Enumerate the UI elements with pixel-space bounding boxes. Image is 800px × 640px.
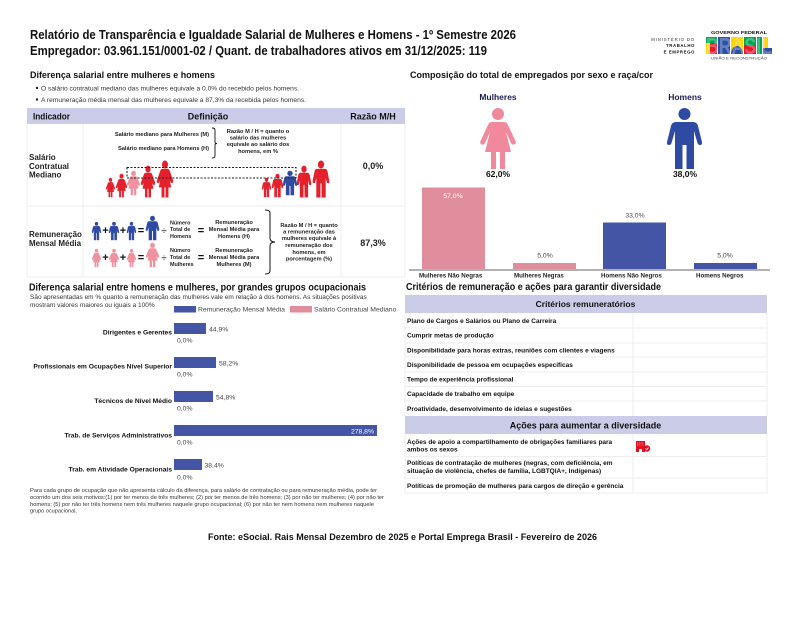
bar chart: grupos: 54,8% bbox=[216, 394, 235, 402]
bar chart: grupos: Profissionais em Ocupações Nível Superior bbox=[33, 364, 172, 370]
bar chart: grupos: Técnicos de Nível Médio bbox=[94, 398, 172, 405]
icon: homens 38,0%: 38,0% bbox=[673, 169, 697, 179]
source note: Fonte: eSocial. Rais Mensal Dezembro de 2025 e Portal Emprega Brasil - Fevereiro de 2026 bbox=[208, 532, 597, 543]
row: remuneração mensal média: Mulheres (M) bbox=[216, 262, 252, 268]
bar chart: composição: Homens Não Negros bbox=[601, 272, 662, 280]
row: remuneração mensal média: Total de bbox=[170, 255, 190, 261]
table header: Indicador bbox=[33, 112, 70, 122]
row: remuneração mensal média: Remuneração bbox=[215, 220, 253, 226]
icon: mulheres 62,0%: Mulheres bbox=[479, 92, 517, 102]
table: critérios remuneratórios: Plano de Cargos e Salários ou Plano de Carreira bbox=[407, 318, 557, 325]
legend: Remuneração Mensal Média bbox=[198, 306, 285, 314]
bar chart: grupos: 58,2% bbox=[219, 360, 238, 368]
bar chart: grupos: 0,0% bbox=[177, 406, 192, 412]
row: remuneração mensal média: mulheres equivale à bbox=[282, 236, 337, 242]
footnote: Para cada grupo de ocupação que não apresenta cálculo da diferença, para salário de contratação ou para remuneração média, pode ter bbox=[30, 488, 377, 494]
logo: governo federal brasil: UNIÃO E RECONSTRUÇÃO bbox=[711, 56, 767, 60]
table: critérios remuneratórios: Disponibilidade para horas extras, reuniões com clientes e viagens bbox=[407, 348, 615, 354]
text block: bullets: A remuneração média mensal das mulheres equivale a 87,3% da recebida pelos homens. bbox=[41, 97, 306, 104]
panel: diferença salarial bbox=[27, 70, 405, 277]
bar chart: grupos: Trab. de Serviços Administrativos bbox=[64, 432, 172, 440]
table: critérios remuneratórios: Critérios remuneratórios bbox=[536, 299, 636, 309]
table: critérios remuneratórios: Proatividade, desenvolvimento de ideias e sugestões bbox=[407, 406, 572, 413]
table: critérios remuneratórios: Capacidade de trabalho em equipe bbox=[407, 391, 515, 398]
operators: mulheres: + bbox=[102, 252, 109, 264]
icon: fórmula mulheres bbox=[92, 243, 159, 267]
title: Empregador: 03.961.151/0001-02 / Quant. de trabalhadores ativos em 31/12/2025: 119 bbox=[30, 44, 487, 58]
legend: Salário Contratual Mediano bbox=[314, 306, 397, 314]
table: indicadores bbox=[27, 108, 405, 277]
footnote bbox=[30, 488, 384, 514]
operators: mulheres bbox=[102, 252, 167, 264]
heading: composição: Composição do total de empregados por sexo e raça/cor bbox=[410, 70, 653, 81]
panel: grupos ocupacionais bbox=[29, 282, 397, 514]
row: remuneração mensal média: Total de bbox=[170, 227, 190, 233]
row: remuneração mensal média: Número bbox=[170, 248, 191, 254]
bar chart: grupos: 0,0% bbox=[177, 474, 192, 482]
row: remuneração mensal média: remuneração dos bbox=[285, 243, 333, 249]
row: remuneração mensal média: Número bbox=[170, 220, 191, 226]
row: remuneração mensal média: Razão M / H = quanto bbox=[280, 223, 338, 229]
bar chart: grupos: Trab. em Atividade Operacionais bbox=[69, 466, 172, 474]
bar chart: composição bbox=[409, 188, 770, 280]
bar chart: grupos bbox=[33, 323, 377, 482]
panel: composição por sexo e raça bbox=[409, 70, 770, 280]
operators: mulheres: = bbox=[138, 252, 144, 264]
footnote: ocorrido um dos seis motivos:(1) por ter menos de três mulheres; (2) por ter menos de três homens; (3) por não ter mulheres; (4) por não ter bbox=[30, 495, 384, 501]
icon: mulheres 62,0%: 62,0% bbox=[486, 169, 510, 179]
bar chart: grupos: 0,0% bbox=[177, 338, 192, 344]
row: salário contratual mediano: Mediano bbox=[29, 170, 62, 180]
row: salário contratual mediano: Salário mediano para Mulheres (M) bbox=[115, 132, 209, 138]
operators: mulheres: ÷ bbox=[161, 253, 167, 264]
row: remuneração mensal média: homens, em bbox=[292, 250, 326, 256]
operators: homens: = bbox=[138, 225, 144, 237]
title: Relatório de Transparência e Igualdade Salarial de Mulheres e Homens - 1º Semestre 2026 bbox=[30, 28, 516, 42]
table: ações para diversidade: Ações de apoio a compartilhamento de obrigações familiares para bbox=[407, 439, 613, 446]
title bbox=[30, 28, 516, 58]
bar chart: grupos: 38,4% bbox=[204, 462, 224, 470]
icon: mulheres 62,0% bbox=[479, 92, 517, 179]
row: salário contratual mediano: Contratual bbox=[29, 162, 69, 171]
table: ações para diversidade: Políticas de contratação de mulheres (negras, com deficiência, em bbox=[407, 460, 613, 467]
logo: ministério do trabalho e emprego: E EMPREGO bbox=[664, 50, 695, 54]
operators: homens: + bbox=[102, 225, 109, 237]
panel: critérios e ações bbox=[405, 282, 767, 493]
bar chart: grupos: 0,0% bbox=[177, 372, 192, 378]
table: ações para diversidade: ambos os sexos bbox=[407, 446, 458, 454]
table header: Razão M/H bbox=[350, 112, 396, 122]
table header: Definição bbox=[188, 112, 229, 122]
table: ações para diversidade: Ações para aumentar a diversidade bbox=[510, 420, 661, 430]
row: remuneração mensal média: a remuneração das bbox=[283, 230, 335, 236]
logo: ministério do trabalho e emprego bbox=[651, 37, 695, 54]
row: salário contratual mediano: 0,0% bbox=[363, 161, 383, 171]
heading: critérios: Critérios de remuneração e ações para garantir diversidade bbox=[406, 282, 662, 293]
bar chart: grupos: 0,0% bbox=[177, 440, 192, 446]
legend bbox=[174, 306, 397, 314]
row: remuneração mensal média: Homens bbox=[170, 234, 191, 240]
bar chart: composição: Mulheres Não Negras bbox=[419, 272, 483, 280]
row: remuneração mensal média: Mensal Média para bbox=[209, 227, 260, 233]
icon: homens 38,0% bbox=[667, 92, 702, 179]
logo: governo federal brasil: BRASIL bbox=[706, 33, 772, 59]
row: remuneração mensal média: Homens (H) bbox=[218, 234, 250, 240]
row: remuneração mensal média: Mensal Média bbox=[29, 239, 82, 248]
bar chart: grupos: Dirigentes e Gerentes bbox=[103, 330, 172, 336]
text block: bullets bbox=[36, 85, 306, 104]
row: remuneração mensal média: Remuneração bbox=[215, 248, 253, 254]
bar chart: composição: Homens Negros bbox=[696, 272, 744, 280]
row: remuneração mensal média: Mensal Média para bbox=[209, 255, 260, 261]
heading: grupos ocupacionais: Diferença salarial entre homens e mulheres, por grandes grupos ocupacionais bbox=[29, 282, 366, 294]
table: critérios remuneratórios: Disponibilidade de pessoa em ocupações específicas bbox=[407, 362, 573, 369]
bar chart: composição: 57,0% bbox=[443, 193, 463, 200]
icon: fórmula homens bbox=[92, 216, 159, 240]
row: salário contratual mediano: equivale ao salário dos bbox=[227, 142, 289, 148]
bar chart: composição: 5,0% bbox=[717, 252, 733, 260]
logo: governo federal brasil: GOVERNO FEDERAL bbox=[711, 30, 767, 35]
row: remuneração mensal média: = bbox=[198, 225, 204, 237]
bar chart: composição: 5,0% bbox=[537, 252, 553, 260]
text block: descrição: São apresentadas em % quanto a remuneração das mulheres vale em relação à dos homens. As situações positivas bbox=[30, 294, 367, 301]
bar chart: composição: 33,0% bbox=[625, 212, 645, 220]
table: ações para diversidade: situação de violência, chefes de família, LGBTQIA+, Indígenas) bbox=[407, 468, 601, 475]
table: critérios remuneratórios bbox=[405, 295, 767, 416]
icon: homens 38,0%: Homens bbox=[668, 92, 702, 102]
row: remuneração mensal média bbox=[29, 210, 386, 274]
dashed median box bbox=[127, 168, 296, 178]
row: salário contratual mediano bbox=[29, 128, 383, 197]
logo: ministério do trabalho e emprego: TRABALHO bbox=[666, 43, 695, 48]
table: ações para diversidade: Políticas de promoção de mulheres para cargos de direção e gerência bbox=[407, 483, 624, 490]
bar chart: grupos: 278,8% bbox=[351, 428, 374, 436]
heading: diferença salarial: Diferença salarial entre mulheres e homens bbox=[30, 70, 215, 81]
row: salário contratual mediano: homens, em % bbox=[238, 149, 278, 155]
operators: homens bbox=[102, 225, 167, 237]
icon: figuras mulheres bbox=[106, 161, 173, 197]
bar chart: grupos: 44,9% bbox=[209, 326, 228, 334]
operators: homens: ÷ bbox=[161, 226, 167, 237]
row: salário contratual mediano: Salário mediano para Homens (H) bbox=[118, 146, 209, 152]
footnote: grupo ocupacional. bbox=[30, 508, 77, 514]
table: ações para diversidade bbox=[405, 416, 767, 493]
row: salário contratual mediano: Razão M / H = quanto o bbox=[227, 129, 290, 135]
table header bbox=[33, 112, 396, 122]
row: salário contratual mediano: salário das mulheres bbox=[230, 136, 286, 142]
row: salário contratual mediano: Salário bbox=[29, 153, 56, 162]
footnote: homens; (5) por não ter três homens nem três mulheres naquele grupo ocupacional; (6) por não ter nem homens nem mulheres naquele bbox=[30, 502, 375, 508]
row: remuneração mensal média: = bbox=[198, 252, 204, 264]
row: remuneração mensal média: Mulheres bbox=[170, 262, 194, 268]
text block: descrição: mostram valores maiores ou iguais a 100% bbox=[30, 302, 155, 309]
table: critérios remuneratórios: Cumprir metas de produção bbox=[407, 332, 494, 340]
row: remuneração mensal média: Remuneração bbox=[29, 230, 82, 239]
icon: empresa com verificação bbox=[636, 441, 650, 452]
text block: bullets: O salário contratual mediano das mulheres equivale a 0.0% do recebido pelos homens. bbox=[41, 85, 299, 92]
operators: mulheres: + bbox=[120, 252, 126, 264]
logo: ministério do trabalho e emprego: MINISTÉRIO DO bbox=[651, 37, 695, 42]
logo: governo federal brasil bbox=[706, 30, 772, 60]
table: critérios remuneratórios: Tempo de experiência profissional bbox=[407, 376, 514, 384]
row: remuneração mensal média: 87,3% bbox=[360, 238, 386, 248]
icon: figuras homens bbox=[262, 161, 329, 197]
operators: homens: + bbox=[120, 225, 126, 237]
row: remuneração mensal média: porcentagem (%) bbox=[286, 256, 332, 262]
bar chart: composição: Mulheres Negras bbox=[514, 272, 564, 280]
